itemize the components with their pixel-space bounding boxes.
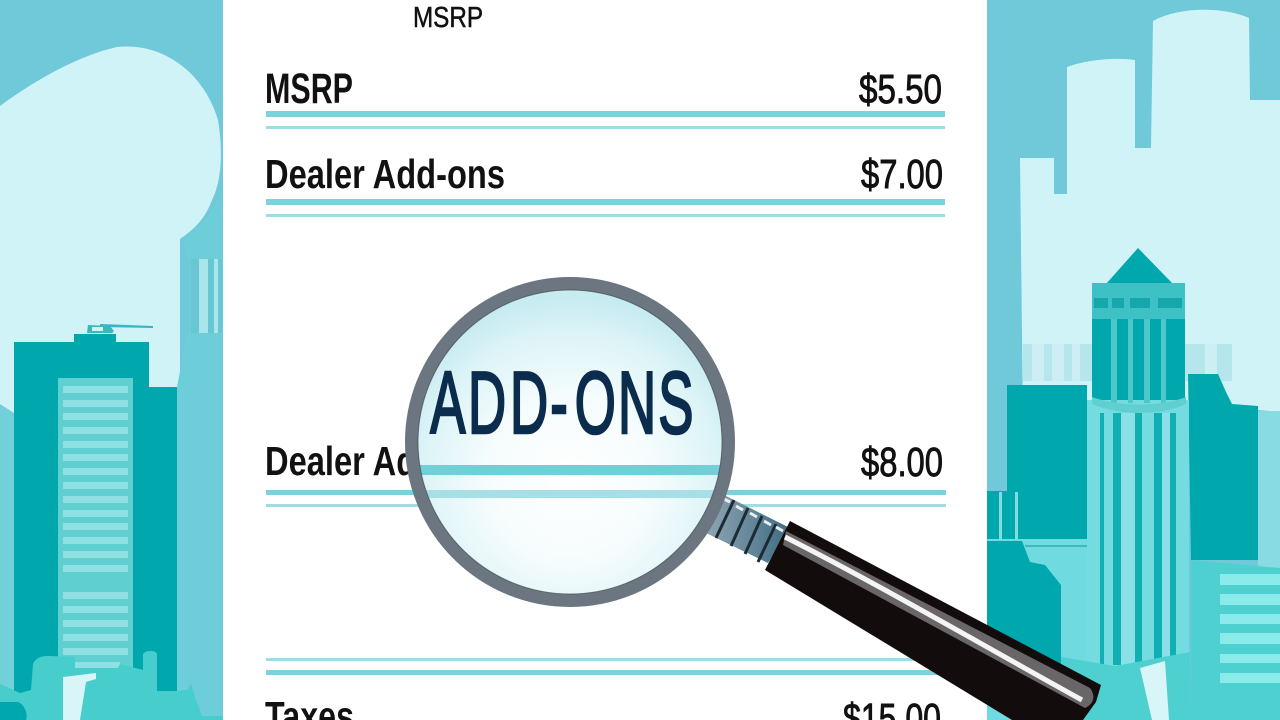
dark teal block left (1007, 385, 1087, 539)
row: Dealer Add-ons: Dealer Add-ons (265, 151, 505, 197)
lower-left mid ground (987, 539, 1088, 720)
foreground right block (1191, 560, 1280, 720)
panel: left city skyline (0, 0, 223, 720)
row: MSRP: MSRP (265, 65, 353, 113)
row: Taxes (265, 658, 946, 720)
foreground low buildings (0, 651, 222, 720)
row: Dealer Add-ons second: $8.00 (861, 439, 943, 485)
row: Dealer Add-ons second (265, 438, 946, 507)
faded mid-distance band (1023, 344, 1232, 381)
row: MSRP (265, 65, 945, 129)
row: MSRP: $5.50 (859, 66, 942, 112)
dark teal block lower left (987, 541, 1061, 670)
dark teal block right (1188, 374, 1258, 560)
tower with columns (177, 192, 222, 720)
row: Dealer Add-ons second: Dealer Add-ons (265, 438, 505, 484)
icon: magnifying glass (412, 284, 1101, 720)
foreground ground (1040, 652, 1191, 720)
foreground crane detail (1140, 661, 1169, 720)
magnified text ADD-ONS: ADD-ONS (430, 354, 693, 452)
small striped block (987, 491, 1020, 539)
striped window column (58, 378, 133, 720)
pale background towers (1020, 10, 1280, 420)
handle (765, 521, 1101, 720)
dark teal office building (14, 324, 177, 720)
lens rim (412, 284, 728, 600)
row: Dealer Add-ons (265, 151, 945, 217)
row: Dealer Add-ons: $7.00 (861, 151, 943, 197)
panel: right city skyline (987, 0, 1280, 720)
lens glass and magnified label (412, 284, 728, 600)
threaded connector (706, 493, 790, 563)
central tower (1087, 248, 1189, 666)
panel: invoice sheet (223, 0, 987, 720)
small heading MSRP: MSRP (413, 2, 483, 34)
